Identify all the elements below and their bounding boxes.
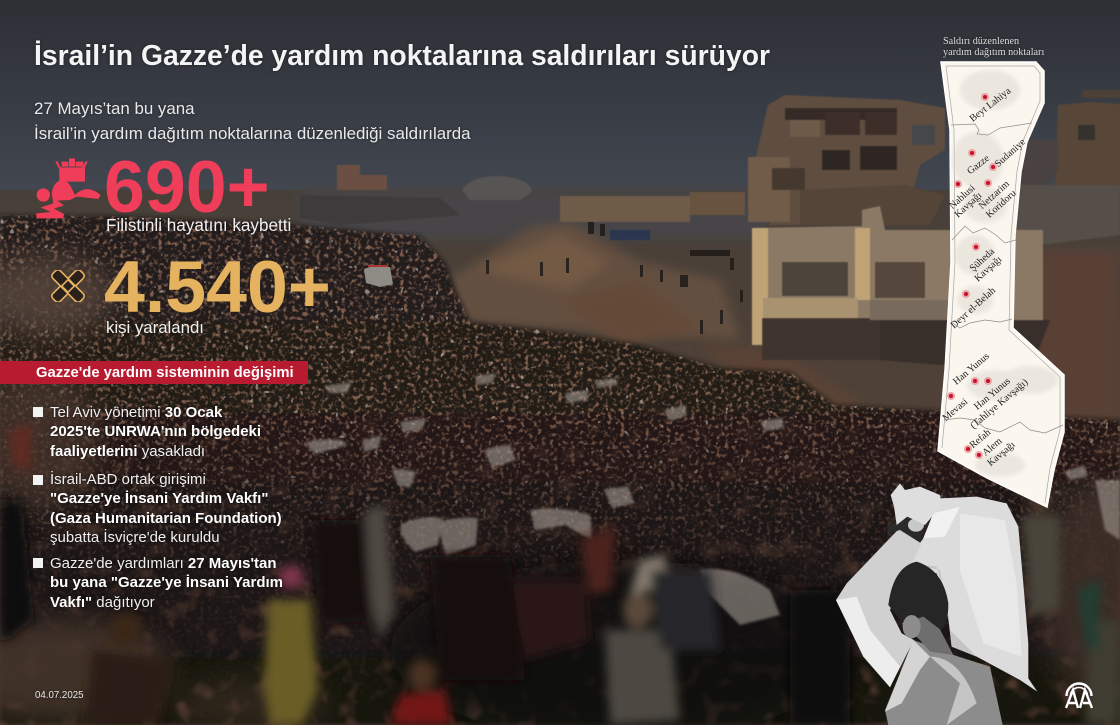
icon: crossed bandages bbox=[51, 270, 85, 302]
map outline bbox=[938, 62, 1064, 507]
map heading: Saldırı düzenlenen bbox=[943, 36, 1019, 47]
head bbox=[888, 562, 948, 630]
lower ruined building bbox=[752, 206, 1050, 372]
bullet text 3: bu yana "Gazze'ye İnsani Yardım bbox=[50, 574, 283, 591]
site labels: Beyt Lahiya bbox=[968, 85, 1014, 124]
bullet text 2: şubatta İsviçre'de kuruldu bbox=[50, 529, 220, 546]
site labels: Kavşağı bbox=[952, 190, 984, 220]
site labels: Koridoru bbox=[984, 188, 1019, 220]
foreground people bbox=[0, 425, 1120, 725]
title: İsrail’in Gazze’de yardım noktalarına saldırıları sürüyor bbox=[34, 39, 770, 71]
map heading bbox=[943, 36, 1044, 58]
dusty ground patches bbox=[0, 255, 1120, 725]
bullet text 3: Vakfı" dağıtıyor bbox=[50, 594, 155, 611]
site labels: Nablusi bbox=[947, 182, 978, 212]
site labels: Alem bbox=[980, 436, 1005, 458]
bullet marker 1 bbox=[33, 407, 43, 417]
bullet text 1: faaliyetlerini yasakladı bbox=[50, 443, 205, 460]
site labels bbox=[941, 85, 1030, 469]
dust and crowd mass bbox=[0, 215, 1120, 725]
upper ruined building bbox=[748, 95, 945, 225]
ground and dust mounds bbox=[0, 190, 1120, 725]
statistic: injured: 4.540+ bbox=[104, 245, 331, 328]
site labels: Deyr el-Belah bbox=[949, 285, 998, 331]
governorate borders bbox=[944, 123, 1063, 433]
dark foreground crowd shade bbox=[390, 560, 850, 725]
subtitle: 27 Mayıs’tan bu yana bbox=[34, 99, 195, 118]
watch bbox=[887, 518, 925, 543]
bullet text 3: Gazze'de yardımları 27 Mayıs'tan bbox=[50, 555, 277, 572]
icon: casualty with aid box bbox=[36, 158, 101, 218]
site markers bbox=[947, 93, 997, 459]
bullet text 2: (Gaza Humanitarian Foundation) bbox=[50, 510, 282, 527]
date: 04.07.2025 bbox=[35, 690, 84, 701]
arm bbox=[836, 528, 922, 687]
section heading text: Gazze'de yardım sisteminin değişimi bbox=[36, 365, 294, 381]
subtitle bbox=[34, 99, 471, 143]
shirt bbox=[885, 640, 1003, 725]
distant ruins on the horizon bbox=[300, 165, 745, 240]
hand bbox=[891, 483, 942, 525]
bullet text 1: Tel Aviv yönetimi 30 Ocak bbox=[50, 404, 222, 421]
bullet text 1: 2025'te UNRWA'nın bölgedeki bbox=[50, 423, 261, 440]
label: deaths: Filistinli hayatını kaybetti bbox=[106, 216, 291, 235]
sack bbox=[906, 497, 1037, 692]
sky bbox=[0, 0, 1120, 240]
bullet marker 3 bbox=[33, 558, 43, 568]
bullet text 2: "Gazze'ye İnsani Yardım Vakfı" bbox=[50, 490, 268, 507]
site labels: Kavşağı bbox=[972, 254, 1004, 284]
site labels: Gazze bbox=[965, 153, 992, 177]
dark people on the mounds bbox=[486, 222, 743, 334]
ambulance bbox=[364, 265, 393, 287]
urban texture bbox=[952, 70, 1058, 477]
map border line bbox=[942, 66, 1060, 503]
bullet text 1 bbox=[50, 404, 261, 460]
bullet marker 2 bbox=[33, 475, 43, 485]
label: injured: kişi yaralandı bbox=[106, 318, 204, 337]
site labels: Netzarim bbox=[977, 178, 1012, 212]
site labels: Sudaniye bbox=[993, 136, 1028, 170]
site labels: (Tahliye Kavşağı) bbox=[968, 377, 1030, 431]
map heading: yardım dağıtım noktaları bbox=[943, 47, 1044, 58]
white aid sacks carried by the crowd bbox=[305, 373, 1120, 625]
crowd texture bbox=[0, 215, 1120, 725]
subtitle: İsrail’in yardım dağıtım noktalarına düzenlediği saldırılarda bbox=[34, 124, 471, 143]
site labels: Mevasi bbox=[941, 396, 970, 424]
site labels: Han Yunus bbox=[951, 351, 992, 387]
bullet text 3 bbox=[50, 555, 284, 611]
right ruined building bbox=[1000, 90, 1120, 245]
site labels: Kavşağı bbox=[985, 439, 1018, 469]
section heading bar bbox=[0, 361, 308, 384]
statistic: deaths: 690+ bbox=[104, 145, 270, 228]
site labels: Şüheda bbox=[968, 246, 997, 274]
AA logo bbox=[1064, 682, 1094, 708]
bullet text 2 bbox=[50, 471, 282, 546]
site labels: Refah bbox=[968, 427, 993, 451]
bullet text 2: İsrail-ABD ortak girişimi bbox=[50, 471, 206, 488]
site labels: Han Yunus bbox=[972, 376, 1013, 412]
